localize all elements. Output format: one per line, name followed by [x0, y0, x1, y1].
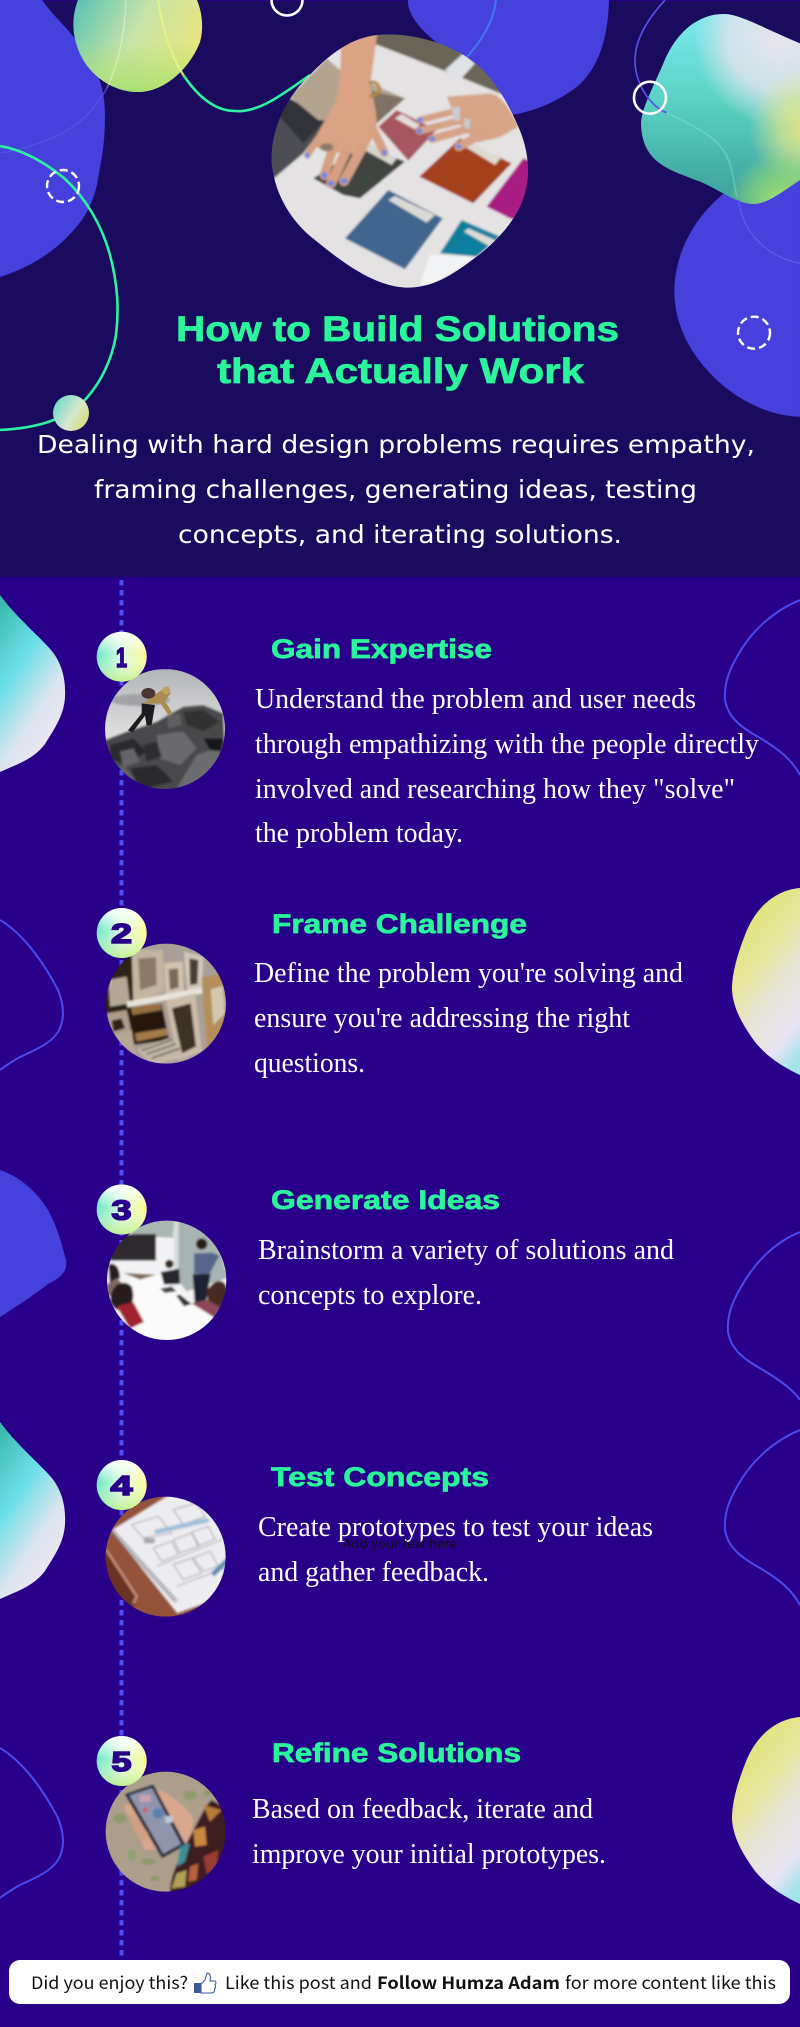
badge 2: 2: [111, 918, 132, 949]
ring: right solid: [634, 82, 666, 114]
heading: Gain Expertise: [271, 634, 492, 664]
body text: improve your initial prototypes.: [252, 1839, 606, 1870]
body text: [254, 958, 683, 1079]
line: top green curve: [184, 75, 310, 111]
step 5: Refine Solutions: [97, 1736, 606, 1895]
title: that Actually Work: [217, 352, 585, 391]
photo: team meeting: [105, 1218, 228, 1343]
intro text: framing challenges, generating ideas, testing: [94, 475, 697, 504]
ring: top center: [272, 0, 302, 16]
line: left green curve: [0, 146, 118, 430]
blob: left gradient step 4: [0, 1422, 65, 1599]
blob: left blue: [0, 0, 105, 277]
step 1: Gain Expertise: [97, 632, 759, 849]
body text: involved and researching how they "solve": [255, 774, 735, 805]
footer call to action: [9, 1960, 790, 2004]
placeholder text: Add your text here: [343, 1533, 457, 1552]
line: left wave step 2: [0, 920, 63, 1070]
intro text: concepts, and iterating solutions.: [178, 520, 622, 549]
footer question: Did you enjoy this?: [31, 1969, 188, 1994]
body text: [258, 1235, 674, 1311]
badge 1: [97, 632, 147, 682]
badge 4: [97, 1460, 147, 1510]
intro text: [37, 430, 755, 549]
badge 3: 3: [112, 1194, 132, 1226]
hero photo: fabric swatches: [272, 34, 528, 288]
blob: right blue: [674, 163, 800, 417]
body text: [258, 1512, 653, 1588]
footer ending: for more content like this: [565, 1969, 776, 1994]
body text: Based on feedback, iterate and: [252, 1794, 593, 1825]
photo: wireframe notebook: [103, 1495, 228, 1618]
body text: concepts to explore.: [258, 1280, 482, 1311]
blob: top center blue: [408, 0, 609, 115]
body text: through empathizing with the people directly: [255, 729, 759, 760]
title: [176, 310, 619, 391]
photo: hand holding phone: [103, 1770, 230, 1895]
body text: [252, 1794, 606, 1870]
blob: top right gradient: [641, 14, 800, 204]
heading: Test Concepts: [271, 1462, 489, 1492]
blob: right gradient step 2: [732, 888, 800, 1075]
line: left blue curve: [0, 88, 107, 153]
line: top green over blob: [158, 0, 184, 76]
step 4: Test Concepts: [97, 1460, 653, 1618]
badge 4: 4: [110, 1470, 133, 1501]
body text: the problem today.: [255, 818, 463, 849]
line: right wave step 4: [725, 1430, 800, 1605]
body text: questions.: [254, 1048, 365, 1079]
badge 3: [97, 1184, 147, 1234]
blob: left blue step 3: [0, 1170, 66, 1317]
badge 2: [97, 908, 147, 958]
blob: left gradient step 1: [0, 595, 65, 772]
footer name: Follow Humza Adam: [377, 1969, 560, 1994]
footer message: Like this post and: [225, 1969, 372, 1994]
photo: climber on rocks: [103, 668, 227, 792]
line: left curve over gradient blob: [107, 0, 126, 88]
heading: Refine Solutions: [272, 1738, 521, 1768]
photo: framed mirrors: [103, 942, 228, 1065]
badge 5: [97, 1736, 147, 1786]
icon: thumbs up: [194, 1973, 216, 1993]
step 3: Generate Ideas: [97, 1184, 674, 1343]
badge 1: 1: [116, 642, 127, 673]
body text: Understand the problem and user needs: [255, 684, 696, 715]
line: left wave step 5: [0, 1748, 63, 1898]
ring: left dashed: [47, 170, 79, 202]
body text: [255, 684, 759, 849]
timeline dotted line: [120, 580, 124, 1960]
badge 5: 5: [112, 1746, 132, 1777]
blob: top gradient: [73, 0, 202, 92]
ring: right dashed: [738, 317, 770, 349]
intro text: Dealing with hard design problems requires empathy,: [37, 430, 755, 459]
step 2: Frame Challenge: [97, 908, 683, 1079]
small gradient ball: [53, 395, 89, 431]
line: right wave step 3: [728, 1232, 800, 1400]
heading: Frame Challenge: [272, 909, 527, 939]
body text: Create prototypes to test your ideas: [258, 1512, 653, 1543]
heading: Generate Ideas: [271, 1185, 500, 1215]
header panel: [0, 0, 800, 577]
side decorations: [0, 595, 800, 1904]
title: How to Build Solutions: [176, 310, 619, 349]
blob: right gradient step 5: [732, 1717, 800, 1904]
body text: and gather feedback.: [258, 1557, 489, 1588]
line: right wave step 1: [725, 600, 800, 775]
body text: ensure you're addressing the right: [254, 1003, 630, 1034]
body text: Brainstorm a variety of solutions and: [258, 1235, 674, 1266]
line: right curve: [635, 0, 800, 263]
line: center blue: [462, 0, 496, 62]
body text: Define the problem you're solving and: [254, 958, 683, 989]
